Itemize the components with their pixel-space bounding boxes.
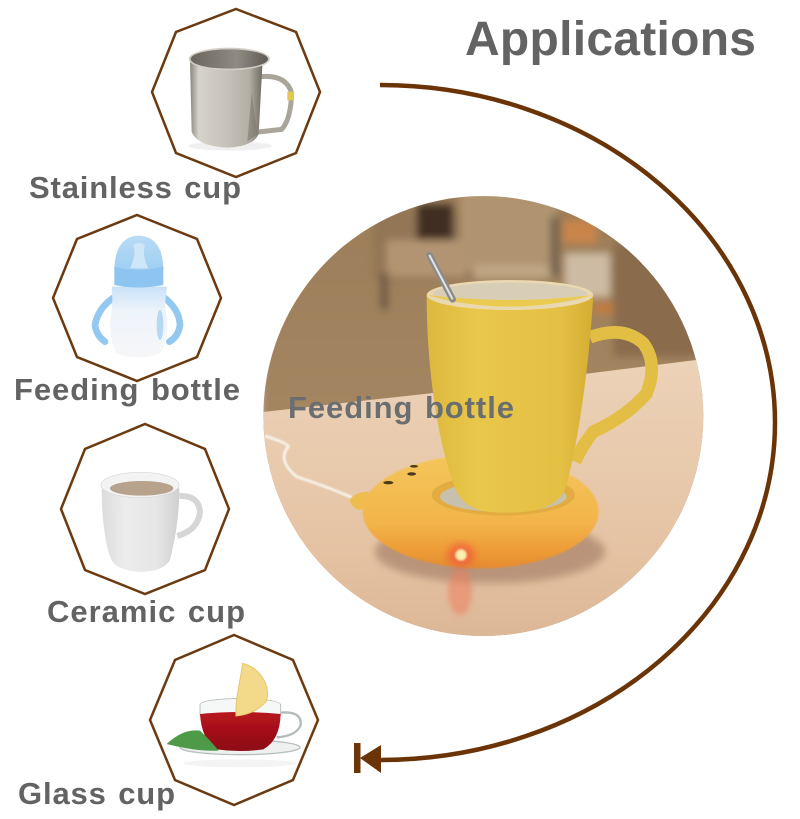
panel: central photo of mug on warmer — [260, 190, 710, 640]
panel: glass cup — [18, 635, 318, 811]
panel: feeding bottle — [14, 215, 240, 407]
curved arrow — [354, 85, 775, 773]
power cord — [265, 436, 352, 497]
label: Feeding bottle — [14, 372, 240, 407]
icon: baby bottle — [95, 236, 180, 357]
octagon frame — [53, 215, 221, 381]
inner overlay label: Feeding bottle — [288, 390, 514, 425]
octagon frame — [152, 9, 320, 177]
label: Ceramic cup — [47, 594, 245, 629]
mug — [427, 280, 652, 513]
indicator LED — [448, 544, 474, 566]
spoon — [429, 255, 453, 299]
warmer base — [349, 455, 599, 568]
red glow — [448, 568, 472, 615]
octagon frame — [150, 635, 318, 805]
panel: stainless cup — [29, 9, 320, 205]
label: Glass cup — [18, 776, 175, 811]
octagon frame — [61, 424, 229, 594]
icon: ceramic mug — [101, 472, 200, 572]
shadow under warmer — [372, 533, 608, 586]
icon: stainless mug — [188, 48, 294, 151]
label: Stainless cup — [29, 170, 241, 205]
table top — [260, 358, 710, 640]
panel: ceramic cup — [47, 424, 245, 629]
background scene — [260, 190, 710, 640]
title: Applications — [465, 13, 756, 66]
icon: tea cup — [167, 663, 301, 767]
